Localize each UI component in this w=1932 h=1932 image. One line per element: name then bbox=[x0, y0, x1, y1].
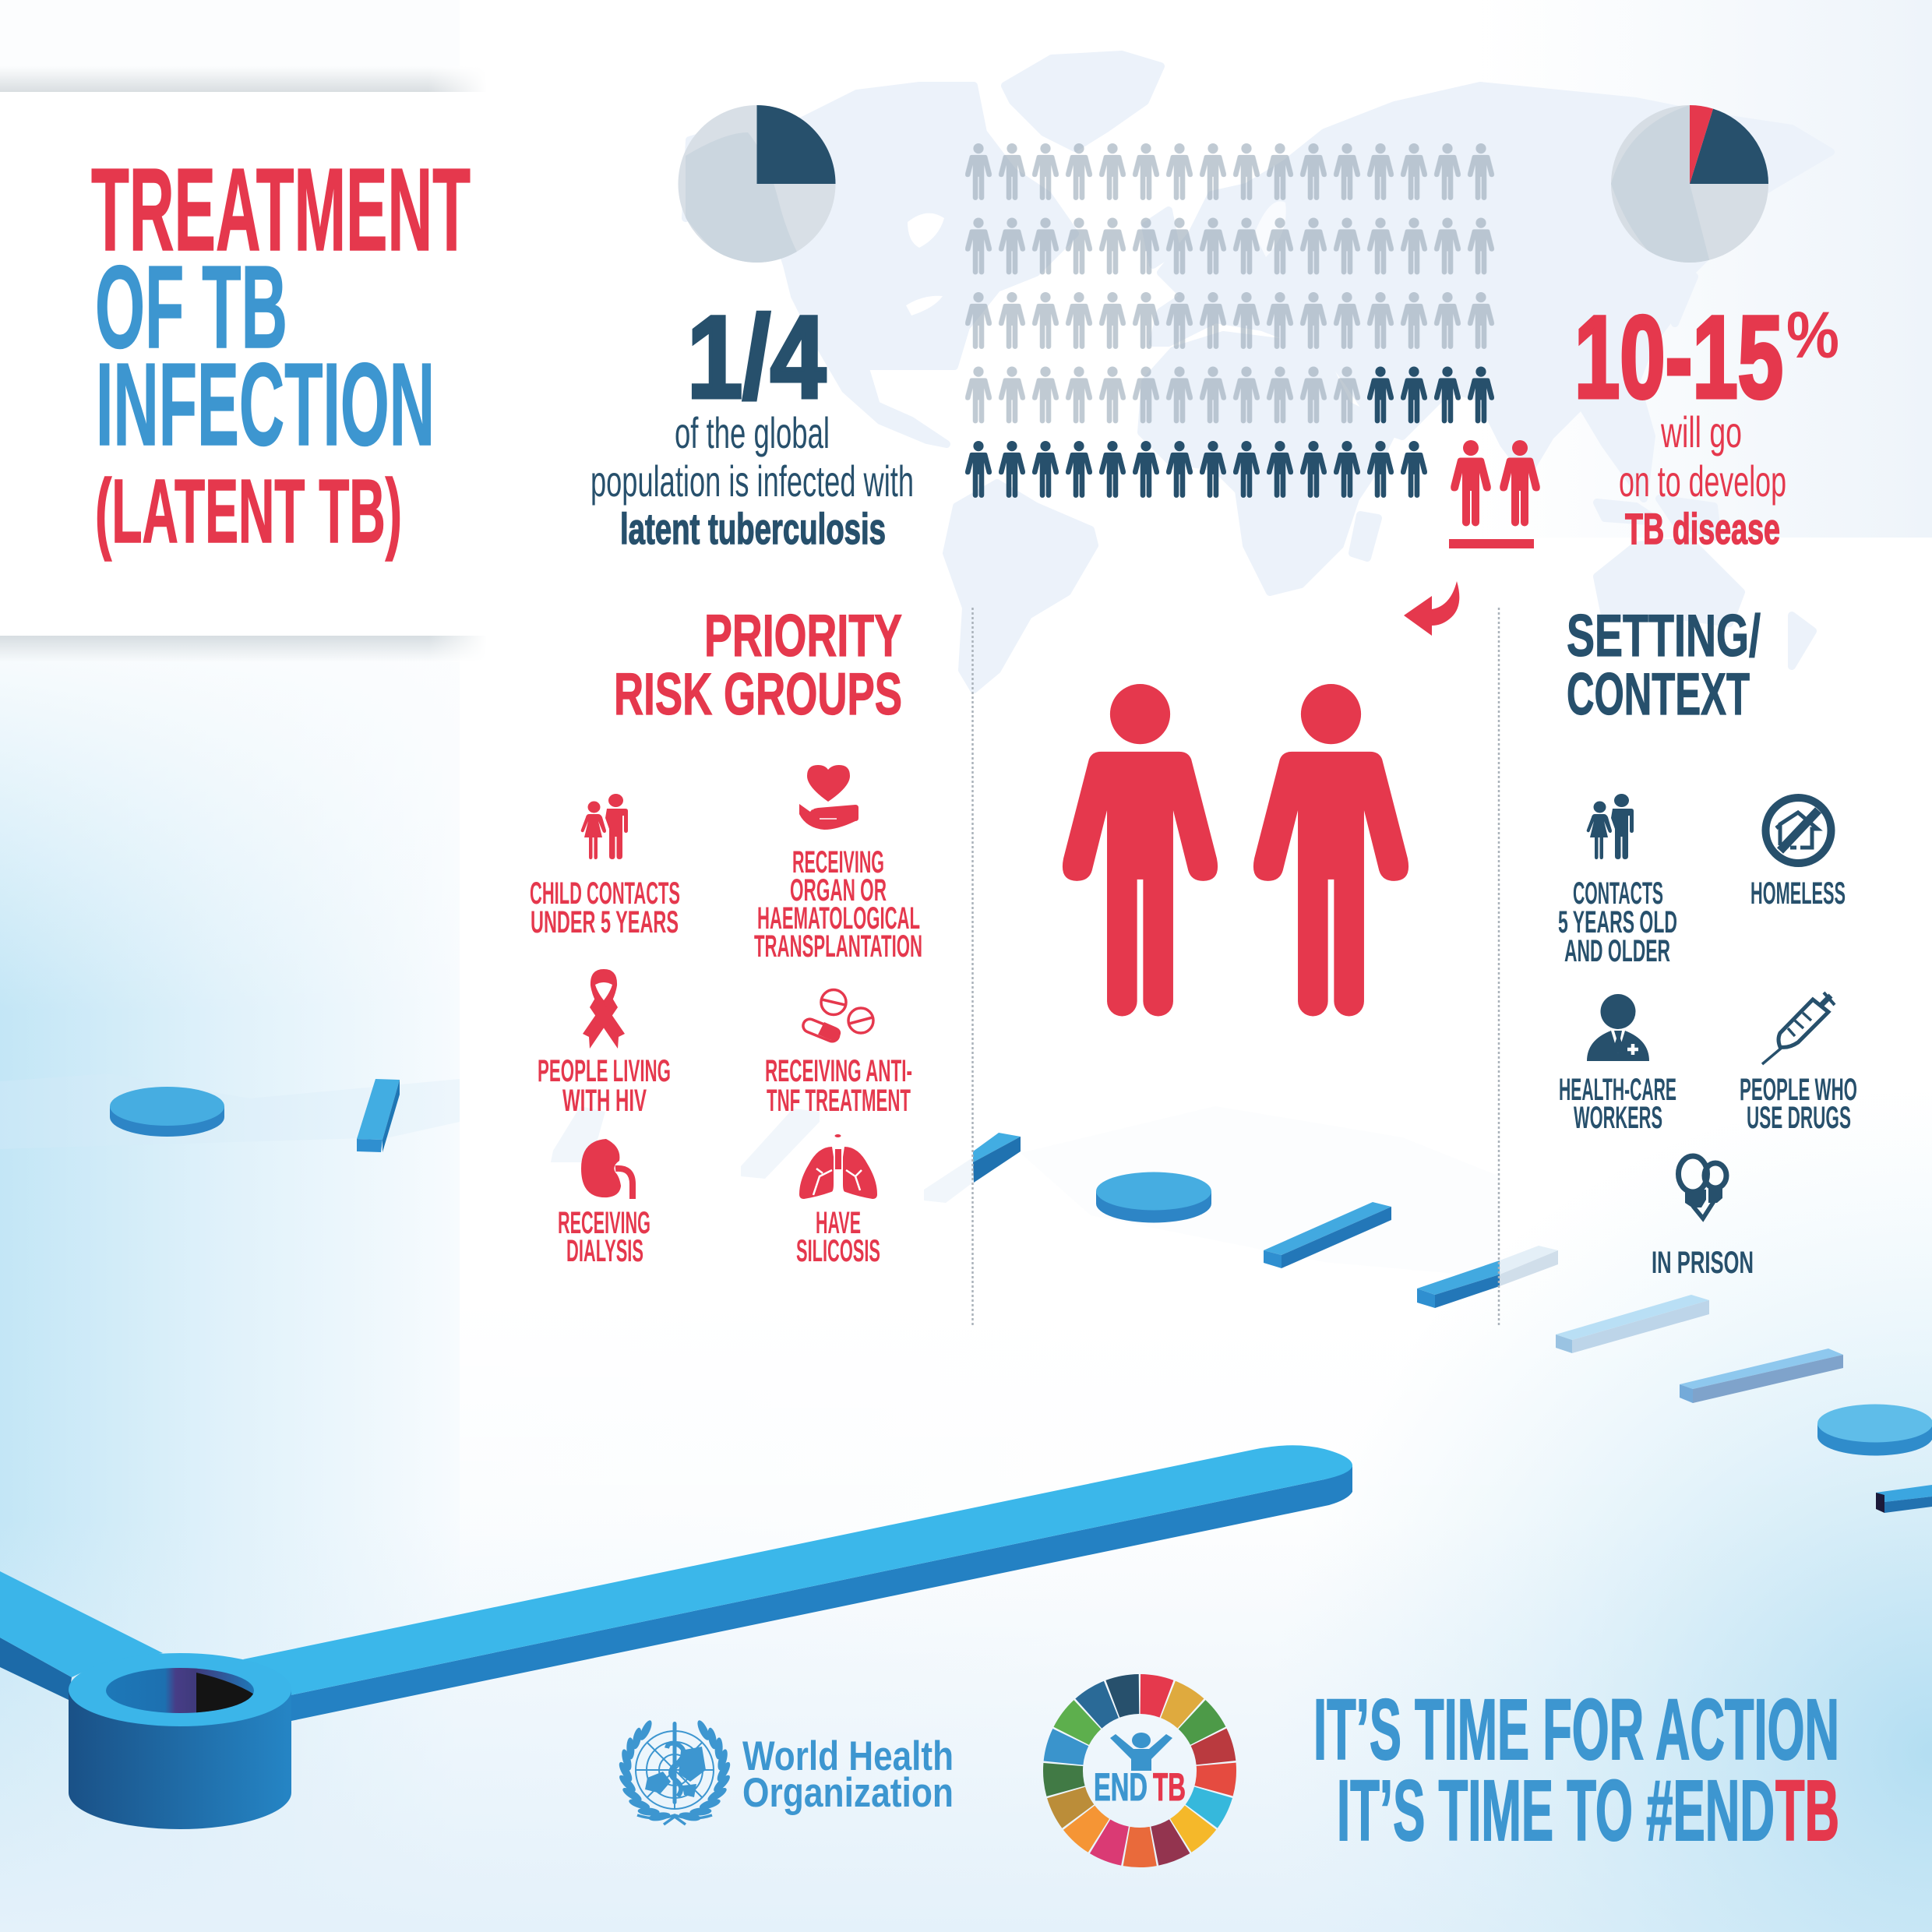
stat: one quarter bbox=[591, 291, 914, 553]
child contacts: CHILD CONTACTS bbox=[530, 876, 680, 911]
main title: INFECTION bbox=[96, 338, 435, 470]
stat: one quarter: population is infected with bbox=[591, 457, 914, 506]
faded bars bbox=[551, 1106, 974, 1203]
disc left bbox=[110, 1087, 224, 1137]
contacts 5 years and older bbox=[1558, 794, 1677, 968]
pie chart: 10-15 percent bbox=[1611, 105, 1768, 263]
kidney: DIALYSIS bbox=[566, 1234, 643, 1268]
health-care workers: WORKERS bbox=[1574, 1101, 1662, 1135]
WHO logo: Organization bbox=[742, 1770, 954, 1816]
organ transplantation: RECEIVING bbox=[792, 845, 884, 880]
HIV ribbon: WITH HIV bbox=[562, 1084, 647, 1118]
heading: priority risk groups: RISK GROUPS bbox=[614, 661, 902, 728]
heading: priority risk groups: PRIORITY bbox=[704, 603, 902, 669]
stat: 10-15 percent: on to develop bbox=[1619, 457, 1786, 506]
big blue structure bbox=[0, 1445, 1352, 1829]
in prison bbox=[1652, 1156, 1754, 1280]
in prison: IN PRISON bbox=[1652, 1246, 1754, 1280]
bar center 1 bbox=[973, 1133, 1021, 1183]
heading: setting context bbox=[1567, 603, 1761, 728]
bar faded 4 bbox=[1556, 1295, 1709, 1353]
child contacts: UNDER 5 YEARS bbox=[531, 905, 679, 940]
End TB wheel logo bbox=[1031, 1662, 1248, 1879]
priority risk groups bbox=[530, 765, 922, 1268]
lungs: SILICOSIS bbox=[796, 1234, 880, 1268]
kidney bbox=[558, 1139, 650, 1268]
long arm bbox=[243, 1445, 1352, 1721]
lungs bbox=[796, 1134, 880, 1268]
people grid bbox=[965, 143, 1540, 548]
HIV ribbon bbox=[538, 969, 671, 1118]
dotted dividers bbox=[972, 608, 1499, 1326]
kidney: RECEIVING bbox=[558, 1206, 650, 1240]
setting context groups bbox=[1558, 794, 1857, 1280]
arrow bbox=[1404, 581, 1459, 636]
stat: 10-15 percent: % bbox=[1786, 298, 1839, 372]
pie chart: one quarter bbox=[678, 105, 835, 263]
WHO logo: World Health bbox=[742, 1733, 954, 1779]
End TB wheel logo: TB bbox=[1153, 1765, 1186, 1809]
bar center 2 bbox=[1264, 1202, 1391, 1268]
homeless: HOMELESS bbox=[1750, 876, 1846, 911]
bar left bbox=[357, 1079, 400, 1152]
health-care workers bbox=[1559, 994, 1676, 1135]
End TB wheel logo: END bbox=[1094, 1765, 1148, 1809]
main title: (LATENT TB) bbox=[95, 460, 402, 562]
organ transplantation bbox=[754, 765, 922, 964]
contacts 5 years and older: 5 YEARS OLD bbox=[1558, 905, 1677, 940]
main title bbox=[91, 143, 471, 562]
stat: 10-15 percent: 10-15 bbox=[1574, 291, 1783, 422]
heading: setting context: SETTING/ bbox=[1567, 603, 1761, 669]
homeless bbox=[1750, 798, 1846, 911]
organ transplantation: HAEMATOLOGICAL bbox=[757, 901, 920, 936]
people who use drugs: USE DRUGS bbox=[1747, 1101, 1851, 1135]
pills: TNF TREATMENT bbox=[767, 1084, 911, 1118]
pills bbox=[765, 989, 912, 1118]
main title: OF TB bbox=[95, 241, 287, 372]
organ transplantation: TRANSPLANTATION bbox=[754, 929, 922, 964]
title panel bbox=[0, 66, 499, 662]
navy rows bbox=[965, 366, 1494, 498]
left arm bbox=[0, 1571, 163, 1700]
health-care workers: HEALTH-CARE bbox=[1559, 1073, 1676, 1107]
pills: RECEIVING ANTI- bbox=[765, 1054, 912, 1088]
red pair bbox=[1449, 440, 1540, 548]
HIV ribbon: PEOPLE LIVING bbox=[538, 1054, 671, 1088]
world map bbox=[686, 55, 1831, 689]
stat: one quarter: latent tuberculosis bbox=[620, 504, 886, 553]
lungs: HAVE bbox=[816, 1206, 861, 1240]
stat: 10-15 percent: TB disease bbox=[1625, 504, 1780, 553]
stat: one quarter: 1/4 bbox=[687, 291, 826, 422]
floor shapes bbox=[110, 1079, 1932, 1513]
heading: setting context: CONTEXT bbox=[1567, 661, 1750, 728]
heading: priority risk groups bbox=[614, 603, 902, 728]
bar center 3 bbox=[1417, 1246, 1558, 1308]
two large red figures bbox=[1063, 684, 1408, 1017]
main title: TREATMENT bbox=[91, 143, 471, 275]
people who use drugs bbox=[1740, 992, 1857, 1135]
WHO emblem bbox=[617, 1719, 732, 1824]
disc right bbox=[1817, 1404, 1932, 1455]
cylinder bbox=[69, 1653, 291, 1829]
child contacts bbox=[530, 794, 680, 940]
bar right edge bbox=[1876, 1485, 1932, 1513]
slogan bbox=[1313, 1682, 1839, 1859]
contacts 5 years and older: AND OLDER bbox=[1564, 934, 1670, 968]
contacts 5 years and older: CONTACTS bbox=[1573, 876, 1663, 911]
grey rows bbox=[965, 143, 1494, 423]
slogan: TB bbox=[1775, 1763, 1839, 1859]
WHO logo bbox=[617, 1719, 954, 1824]
stat: 10-15 percent: will go bbox=[1660, 407, 1742, 457]
stat: one quarter: of the global bbox=[675, 408, 830, 457]
stat: 10-15 percent bbox=[1574, 291, 1839, 553]
organ transplantation: ORGAN OR bbox=[790, 873, 887, 908]
bar faded 5 bbox=[1680, 1349, 1843, 1403]
disc center bbox=[1096, 1172, 1211, 1222]
